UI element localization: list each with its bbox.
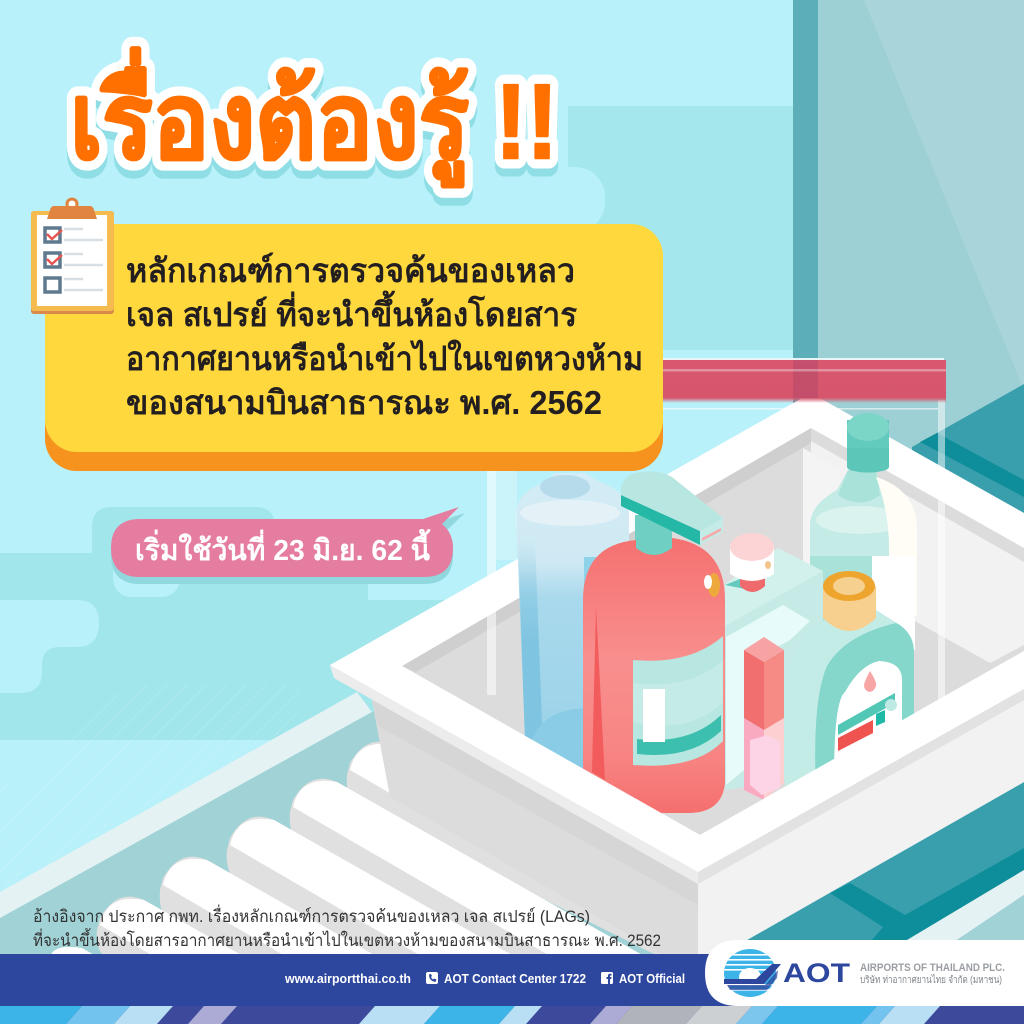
icon: AOT emblem [720, 949, 781, 997]
heading text: เจล สเปรย์ ที่จะนำขึ้นห้องโดยสาร [126, 290, 577, 333]
heading text [126, 252, 643, 421]
floor teal panels [747, 384, 1024, 954]
floor strip left [0, 684, 700, 960]
source note: อ้างอิงจาก ประกาศ กพท. เรื่องหลักเกณฑ์การตรวจค้นของเหลว เจล สเปรย์ (LAGs) [33, 904, 590, 926]
lip gloss tube [744, 637, 784, 800]
heading text: ของสนามบินสาธารณะ พ.ศ. 2562 [126, 384, 602, 421]
title: เรื่องต้องรู้ !! [70, 47, 558, 188]
source note [33, 904, 661, 950]
icon: phone [426, 972, 438, 984]
tray front rim [330, 651, 1024, 884]
heading text: หลักเกณฑ์การตรวจค้นของเหลว [126, 252, 575, 289]
logo wordmark: AOT [783, 958, 851, 988]
bottle: mint back [810, 413, 917, 650]
callout: start date pill [111, 507, 465, 584]
footer colour strip [0, 1006, 1024, 1024]
bottle: mint front with label [785, 571, 914, 790]
conveyor rollers [50, 742, 690, 972]
tray back and interior [330, 393, 1024, 975]
box: pale mint carton [725, 548, 823, 790]
footer banner [0, 954, 1024, 1006]
panel: yellow heading box [45, 224, 663, 471]
bottle: blue back [516, 473, 629, 775]
title: เรื่องต้องรู้ !! [70, 47, 558, 188]
wall panels top right [663, 0, 1024, 460]
plastic zip bag [487, 358, 946, 705]
icon: clipboard checklist [31, 199, 114, 314]
contact center: AOT Contact Center 1722 [444, 972, 586, 986]
icon: facebook [601, 972, 613, 984]
bottle: red pump [583, 472, 725, 813]
heading text: อากาศยานหรือนำเข้าไปในเขตหวงห้าม [126, 339, 643, 377]
callout: start date pill: เริ่มใช้วันที่ 23 มิ.ย. 62 นี้ [135, 528, 431, 567]
panel: AOT logo plate [705, 940, 1024, 1006]
title: เรื่องต้องรู้ !! [70, 55, 558, 196]
source note: ที่จะนำขึ้นห้องโดยสารอากาศยานหรือนำเข้าไปในเขตหวงห้ามของสนามบินสาธารณะ พ.ศ. 2562 [33, 928, 661, 950]
company name: AIRPORTS OF THAILAND PLC. [860, 962, 1005, 974]
small jar [730, 533, 774, 592]
facebook name: AOT Official [619, 972, 685, 986]
website: www.airportthai.co.th [284, 972, 411, 986]
